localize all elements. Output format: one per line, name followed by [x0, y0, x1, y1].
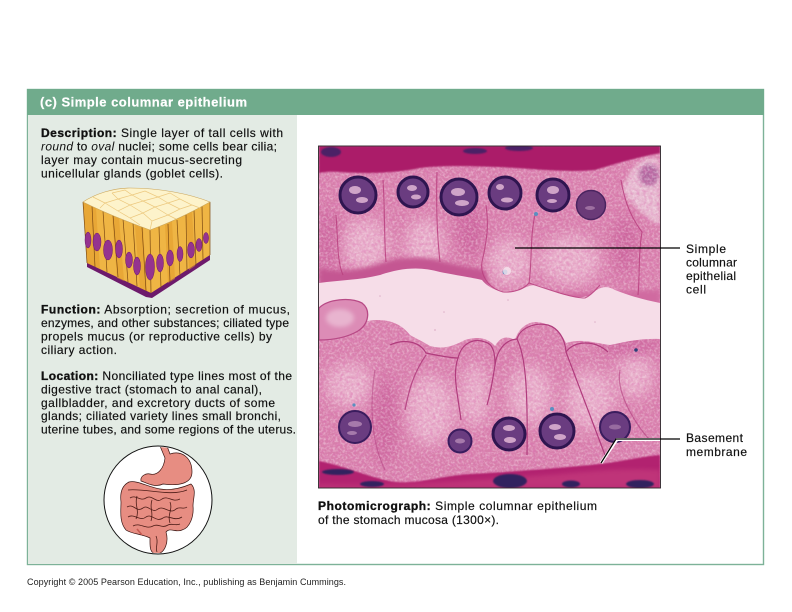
detached cell at lumen edge — [319, 300, 368, 340]
label: basement membrane: membrane — [686, 445, 747, 459]
text block: location — [41, 369, 296, 436]
header bar — [27, 89, 764, 115]
panel: simple columnar epithelium — [27, 89, 764, 564]
label: simple columnar epithelial cell — [686, 242, 737, 296]
text block: location: uterine tubes, and some regions of the uterus. — [41, 422, 296, 436]
lumen — [319, 268, 660, 347]
upper magenta band — [319, 146, 660, 173]
caption: of the stomach mucosa (1300×). — [318, 513, 499, 527]
text block: function: enzymes, and other substances; ciliated type — [41, 316, 289, 330]
large intestine — [121, 482, 194, 554]
dark connective tissue nuclei — [322, 469, 654, 488]
label: simple columnar epithelial cell: Simple — [686, 242, 726, 256]
top cell mosaic — [93, 190, 200, 230]
leader line: basement membrane — [601, 439, 680, 463]
caption: Photomicrograph: Simple columnar epithelium — [318, 499, 597, 513]
upper nuclei — [340, 177, 606, 220]
esophagus and stomach — [141, 446, 192, 486]
label: basement membrane: Basement — [686, 431, 744, 445]
basement membrane band — [319, 455, 660, 488]
darker tissue tone — [318, 202, 660, 465]
photomicrograph — [318, 145, 660, 488]
label: simple columnar epithelial cell: epithelial — [686, 269, 736, 283]
heading: (c) Simple columnar epithelium — [40, 94, 247, 110]
copyright: Copyright © 2005 Pearson Education, Inc., publishing as Benjamin Cummings. — [27, 577, 346, 587]
nuclei — [85, 232, 209, 280]
appendix — [137, 529, 142, 535]
cell sides — [83, 202, 210, 293]
cell walls — [83, 202, 210, 293]
cell membranes lower layer — [372, 324, 650, 470]
icon: digestive tract in circle — [104, 446, 212, 554]
leader line: simple columnar epithelial cell — [515, 247, 680, 249]
text block: location: Location: Nonciliated type lines most of the — [41, 369, 292, 383]
caption — [318, 499, 597, 527]
text block: description — [41, 126, 283, 180]
text block: description: layer may contain mucus-secreting — [41, 153, 242, 167]
text block: function: ciliary action. — [41, 343, 117, 357]
text block: location: glands; ciliated variety lines small bronchi, — [41, 409, 281, 423]
text block: description: unicellular glands (goblet cells). — [41, 166, 223, 180]
label: basement membrane — [686, 431, 747, 459]
top surface — [83, 188, 210, 230]
goblet vacuole — [622, 157, 660, 225]
blue specks — [352, 212, 638, 411]
label: simple columnar epithelial cell: columnar — [686, 256, 737, 270]
panel frame — [28, 90, 764, 564]
text block: location: digestive tract (stomach to anal canal), — [41, 382, 262, 396]
tissue base — [319, 146, 660, 488]
left column background — [28, 115, 297, 564]
text block: function: Function: Absorption; secretion of mucus, — [41, 302, 290, 316]
icon: epithelium block illustration — [83, 188, 210, 298]
dark nuclei at upper edge — [321, 145, 533, 157]
lighter cell cytoplasm patches — [326, 219, 653, 445]
text block: location: gallbladder, and excretory ducts of some — [41, 396, 275, 410]
small intestine folds — [127, 490, 187, 552]
label: simple columnar epithelial cell: cell — [686, 282, 706, 296]
cell membranes upper layer — [336, 172, 642, 298]
photo outline — [318, 146, 660, 488]
text block: function — [41, 302, 290, 357]
text block: description: round to oval nuclei; some cells bear cilia; — [41, 140, 277, 154]
texture speckle — [319, 146, 660, 488]
lower nuclei — [339, 411, 630, 452]
text block: function: propels mucus (or reproductive cells) by — [41, 330, 272, 344]
apical darker band — [319, 257, 490, 290]
text block: description: Description: Single layer of tall cells with — [41, 126, 283, 140]
basement layer — [87, 252, 210, 298]
